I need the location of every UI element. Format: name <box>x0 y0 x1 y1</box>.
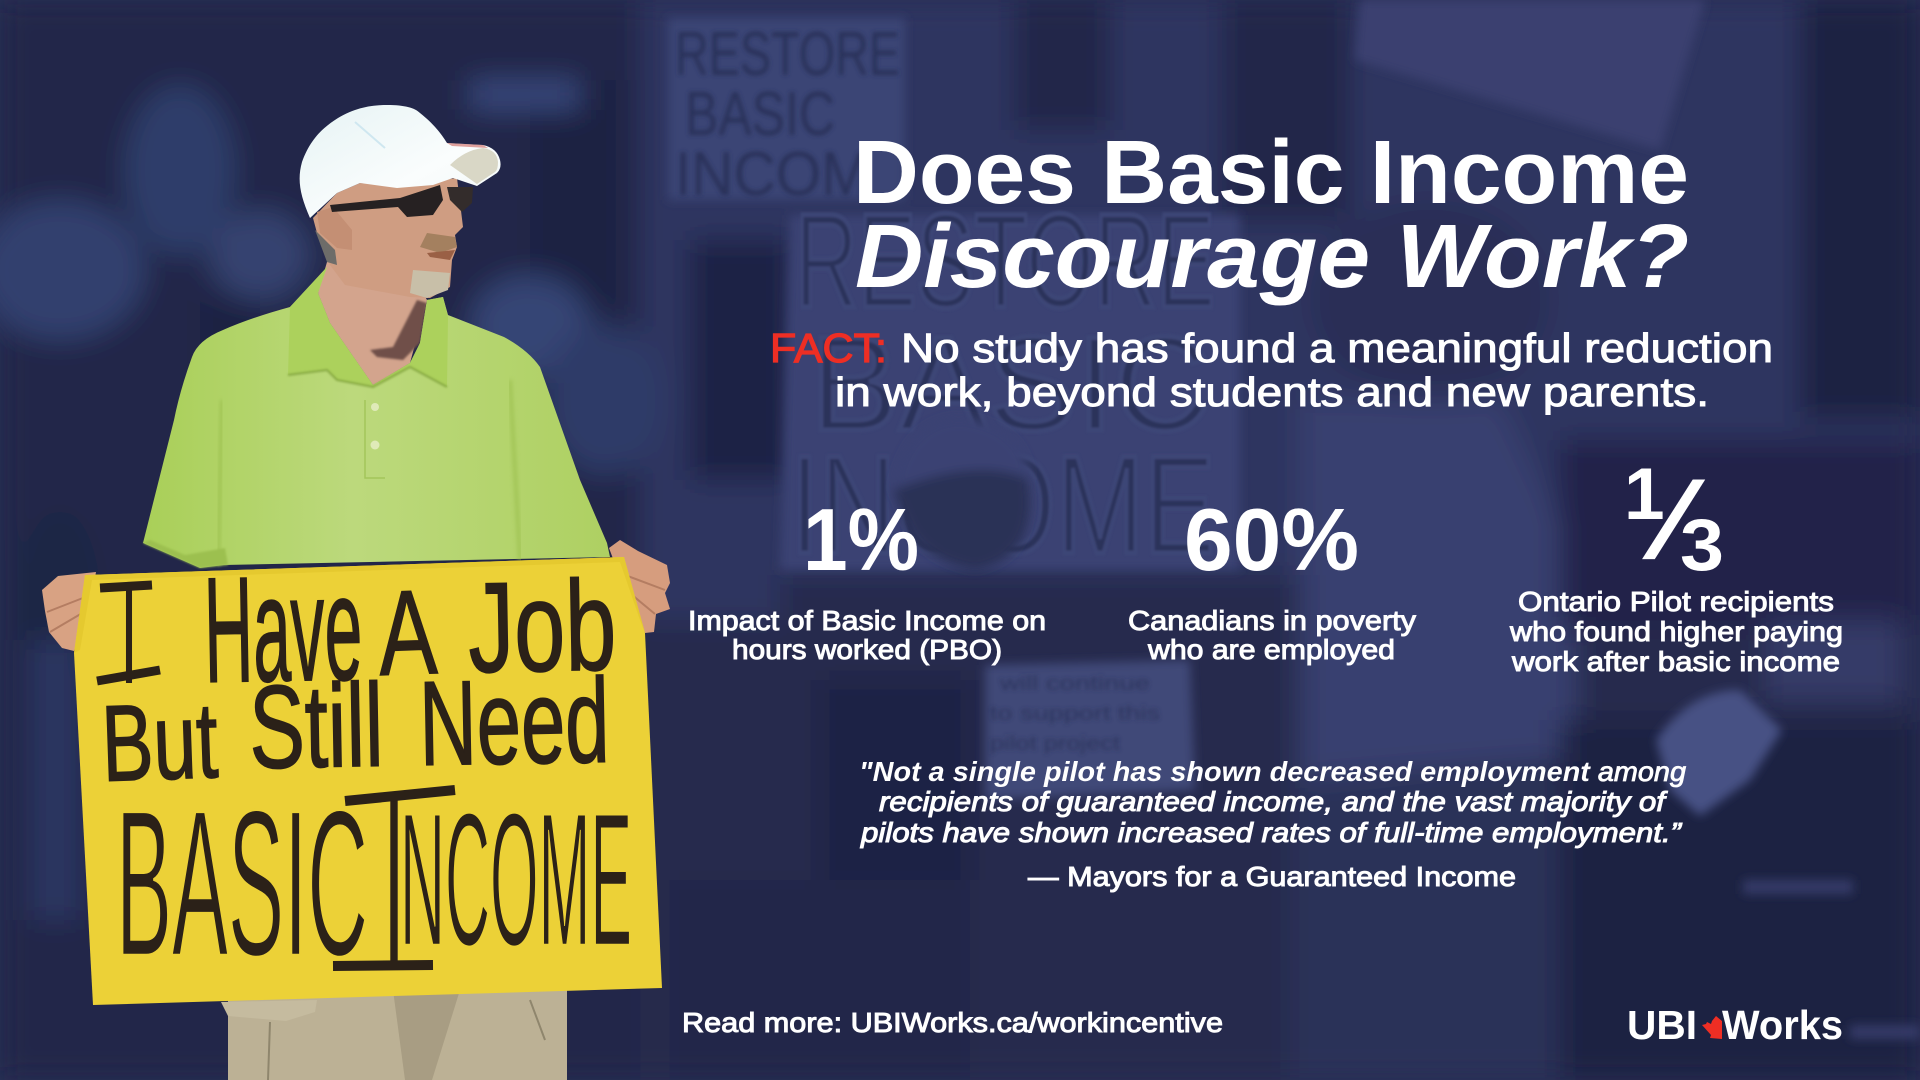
sign lettering: But <box>100 679 220 804</box>
sign lettering: Still <box>248 660 384 794</box>
background: blurred crowd photo: BASIC <box>685 80 835 149</box>
neck and face <box>313 178 463 385</box>
background: blurred crowd photo: INCOM <box>675 140 870 209</box>
icon: maple leaf <box>1702 1016 1722 1039</box>
pants <box>221 990 567 1080</box>
right hand <box>609 540 670 633</box>
quote: recipients of guaranteed income, and the vast majority of <box>879 786 1669 817</box>
logo: UBI Works <box>1627 1002 1843 1048</box>
read more link: Read more: UBIWorks.ca/workincentive <box>682 1007 1223 1038</box>
background: blurred crowd photo: to support this <box>990 703 1160 725</box>
background: blurred crowd photo: RESTORE <box>795 187 1215 336</box>
person holding sign <box>42 105 670 1080</box>
text: NCOME <box>400 774 632 986</box>
background: blurred crowd photo: RESTORE <box>675 20 900 89</box>
sign lettering: Need <box>418 654 610 791</box>
stat: one third: Ontario Pilot recipients <box>1518 586 1834 617</box>
stat: one third: 1 <box>1624 454 1665 535</box>
collar <box>288 267 448 387</box>
sunglasses <box>330 185 473 217</box>
quote: pilots have shown increased rates of full-time employment.” <box>860 817 1683 848</box>
stat: one third: who found higher paying <box>1509 616 1843 647</box>
sign lettering: BASIC <box>116 768 368 1000</box>
logo: UBI Works: UBI <box>1627 1002 1697 1048</box>
logo: UBI Works: Works <box>1722 1002 1843 1048</box>
stat: 1% <box>688 490 1046 665</box>
stat: 1%: Impact of Basic Income on <box>688 605 1046 636</box>
sign lettering: Job <box>467 554 617 700</box>
fact statement: in work, beyond students and new parents. <box>835 369 1709 415</box>
left hand <box>42 572 96 651</box>
sign lettering <box>97 543 632 1018</box>
quote attribution: — Mayors for a Guaranteed Income <box>1028 861 1516 892</box>
title: Discourage Work? <box>855 207 1689 307</box>
background: blurred crowd photo: INCOME <box>790 426 1215 583</box>
stat: one third: / <box>1632 460 1715 580</box>
background: blurred crowd photo: will continue <box>999 673 1150 695</box>
fact statement: FACT: <box>770 325 887 371</box>
stat: 60%: 60% <box>1184 490 1359 589</box>
white cap <box>300 105 501 218</box>
stat: 60% <box>1128 490 1416 665</box>
stat: 60%: Canadians in poverty <box>1128 605 1416 636</box>
quote <box>859 756 1686 848</box>
stat: 1%: hours worked (PBO) <box>732 634 1002 665</box>
background: blurred crowd photo: pilot project <box>990 733 1121 755</box>
stat: one third: 3 <box>1680 505 1724 586</box>
sign lettering: I <box>120 560 138 712</box>
sign lettering: A <box>376 565 439 701</box>
title <box>853 123 1689 307</box>
background: blurred crowd photo: BASIC <box>810 310 1210 459</box>
stat: one third <box>1509 454 1843 677</box>
ear <box>317 207 352 250</box>
sign lettering: I <box>383 739 405 1018</box>
fact statement: No study has found a meaningful reduction <box>901 325 1773 371</box>
stat: 1%: 1% <box>803 490 919 589</box>
stat: 60%: who are employed <box>1147 634 1395 665</box>
yellow sign <box>74 543 662 1018</box>
fact statement <box>770 325 1773 415</box>
quote: "Not a single pilot has shown decreased employment among <box>859 756 1686 787</box>
title: Does Basic Income <box>853 123 1689 223</box>
green polo shirt <box>143 267 610 568</box>
sign lettering: Have <box>203 543 364 714</box>
stat: one third: work after basic income <box>1511 646 1840 677</box>
